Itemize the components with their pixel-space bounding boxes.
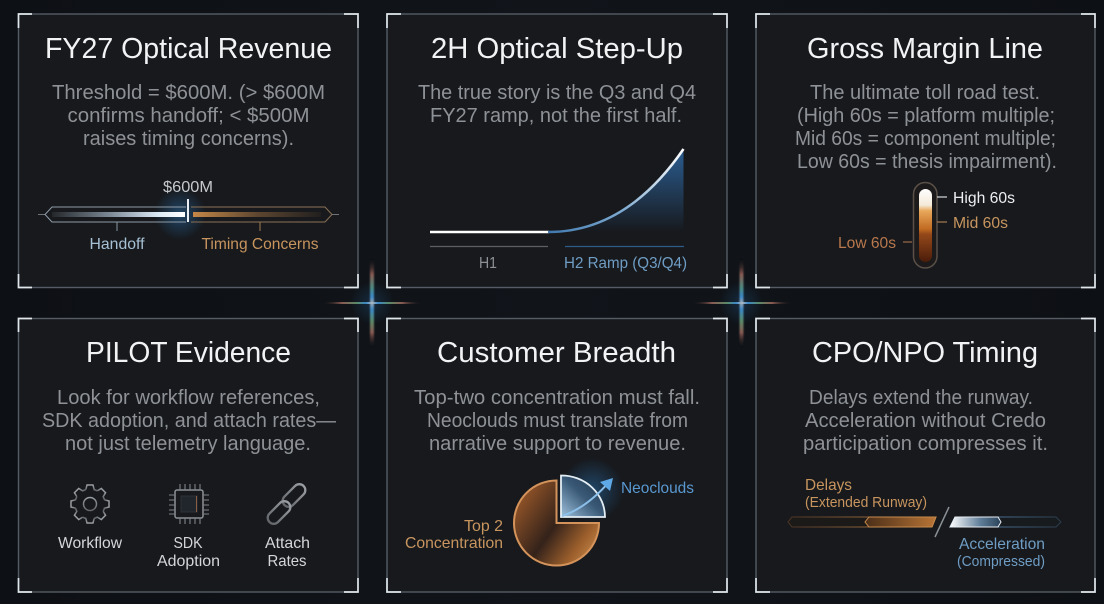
panel: Gross Margin Line [756,14,1095,288]
panel: 2H Optical Step-Up [387,14,727,288]
label: Low 60s: Low 60s [838,235,896,252]
text block: Neoclouds must translate from [427,410,688,432]
text block [418,82,696,127]
label: Top 2 Concentration: Concentration [405,535,503,552]
divider slash [935,507,949,537]
label: Top 2 Concentration: Top 2 [464,518,503,535]
heading: CPO/NPO Timing [812,337,1038,369]
label: Handoff: Handoff [90,236,145,253]
slice: neoclouds [561,475,605,517]
label: Attach Rates: Attach [265,535,310,552]
text block: Mid 60s = component multiple; [795,128,1056,150]
heading: FY27 Optical Revenue [45,33,332,65]
panel: CPO/NPO Timing [756,318,1095,592]
label: Workflow: Workflow [58,535,122,552]
text block: The true story is the Q3 and Q4 [418,82,696,104]
label: SDK Adoption [157,535,220,570]
bar: delays [788,517,936,527]
text block: SDK adoption, and attach rates— [42,410,336,432]
label: Delays [805,477,927,511]
label: Mid 60s: Mid 60s [953,215,1008,232]
panel: PILOT Evidence [18,318,358,592]
heading: PILOT Evidence [86,337,291,369]
label: Neoclouds: Neoclouds [621,480,694,497]
text block: Look for workflow references, [57,387,320,409]
label: Attach Rates: Rates [268,553,306,570]
text block: participation compresses it. [803,433,1048,455]
text block: narrative support to revenue. [429,433,686,455]
text block: confirms handoff; < $500M [68,105,310,127]
text block: Top-two concentration must fall. [414,387,700,409]
arrow [562,478,613,516]
text block: not just telemetry language. [65,433,311,455]
label: Acceleration: (Compressed) [957,553,1045,570]
text block: The ultimate toll road test. [810,82,1040,104]
light flare: left cross [322,258,422,348]
label: Timing Concerns: Timing Concerns [202,236,318,253]
text block: (High 60s = platform multiple; [797,105,1055,127]
text block [414,387,700,455]
text block: Acceleration without Credo [805,410,1046,432]
label: Top 2 Concentration [405,518,503,552]
label: $600M: $600M [163,179,213,196]
ramp chart [430,149,687,272]
text block [52,82,325,150]
text block: Threshold = $600M. (> $600M [52,82,325,104]
text block [803,387,1048,455]
text block [795,82,1057,173]
timing bars [788,477,1061,570]
label: H2 Ramp: H2 Ramp (Q3/Q4) [564,255,687,272]
heading: Gross Margin Line [807,33,1043,65]
panel: Customer Breadth [387,318,727,592]
text block: Low 60s = thesis impairment). [797,151,1057,173]
label: Delays: Delays [805,477,852,494]
label: Delays: (Extended Runway) [805,494,927,511]
text block [42,387,336,455]
thermometer gauge [838,182,1015,268]
icon: chip [169,484,209,524]
label: SDK Adoption: SDK [174,535,203,552]
label: H1: H1 [479,255,497,272]
slice: top 2 concentration [514,480,599,566]
threshold gauge [38,179,339,253]
heading: Customer Breadth [437,337,676,369]
text block: FY27 ramp, not the first half. [430,105,682,127]
label: Acceleration: Acceleration [959,536,1045,553]
text block: Delays extend the runway. [809,387,1033,409]
label: Acceleration [957,536,1045,570]
panel: FY27 Optical Revenue [18,14,358,288]
heading: 2H Optical Step-Up [431,33,683,65]
label: Attach Rates [265,535,310,570]
bar: acceleration [950,517,1061,527]
icon: link [265,482,308,526]
icon: gear [71,485,109,523]
light flare: right cross [692,258,792,348]
label: SDK Adoption: Adoption [157,553,220,570]
text block: raises timing concerns). [83,128,294,150]
pie chart [405,458,694,566]
label: High 60s: High 60s [953,190,1015,207]
